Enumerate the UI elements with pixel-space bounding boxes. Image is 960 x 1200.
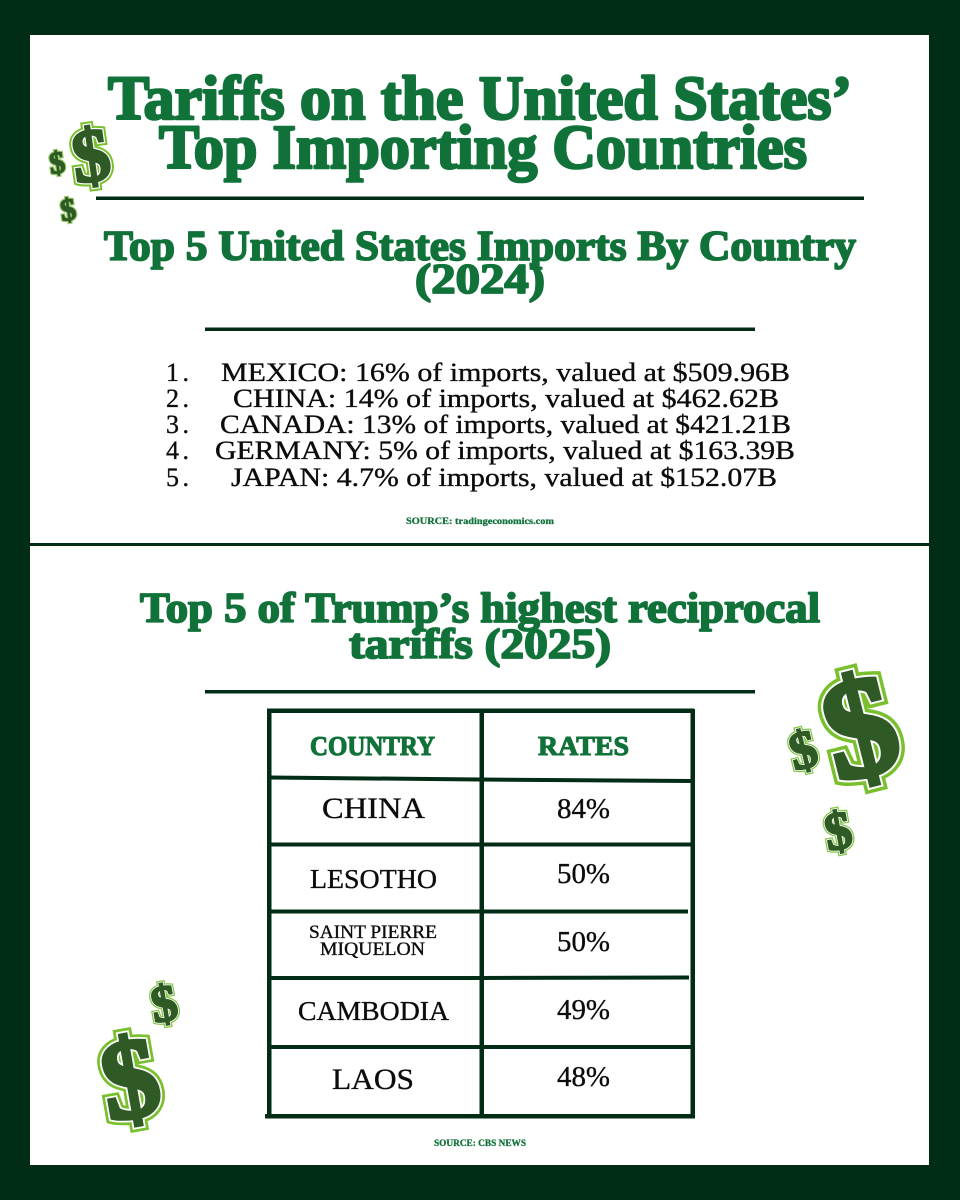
imports list: 4. (166, 436, 189, 465)
heading: reciprocal tariffs: tariffs (2025) (349, 622, 611, 668)
imports list: GERMANY: 5% of imports, valued at $163.39B (215, 436, 795, 465)
icon: dollar large bottom left: $ (91, 1011, 169, 1146)
icon: dollar small top left 1: $ (47, 144, 67, 181)
imports list: 1. (166, 358, 189, 387)
heading: reciprocal tariffs: Top 5 of Trump’s highest reciprocal (140, 586, 820, 632)
imports list: 2. (166, 384, 189, 413)
rates column: 84% (557, 794, 610, 825)
icon: dollar small right 2: $ (820, 799, 857, 863)
icon: dollar large top left: $ (66, 112, 116, 200)
icon: dollar large right: $ (807, 642, 914, 812)
rates column (557, 794, 610, 1093)
icon: dollar small right 2: $ (820, 799, 857, 863)
country column: CHINA (322, 792, 425, 825)
icon: dollar large bottom left: $ (91, 1011, 169, 1146)
icon: dollar large right: $ (807, 642, 914, 812)
icon: dollar small right 2: $ (820, 799, 857, 863)
icon: dollar small right 1: $ (783, 718, 824, 782)
icon: dollar small top left 2: $ (58, 191, 78, 228)
table header: RATES (538, 731, 629, 761)
icon: dollar large top left: $ (66, 112, 116, 200)
source: cbs news: SOURCE: CBS NEWS (434, 1139, 526, 1149)
imports list: 3. (166, 410, 189, 439)
heading: top 5 imports: (2024) (415, 257, 545, 303)
icon: dollar small bottom left: $ (147, 974, 182, 1035)
title (108, 65, 852, 182)
country column: CAMBODIA (298, 996, 450, 1026)
icon: dollar small top left 1: $ (47, 144, 67, 181)
imports list: CHINA: 14% of imports, valued at $462.62B (233, 384, 779, 413)
imports list: JAPAN: 4.7% of imports, valued at $152.07B (231, 463, 777, 492)
rates column: 50% (557, 927, 610, 958)
icon: dollar large right: $ (807, 642, 914, 812)
heading: reciprocal tariffs (140, 586, 820, 668)
icon: dollar large bottom left: $ (91, 1011, 169, 1146)
icon: dollar small bottom left: $ (147, 974, 182, 1035)
imports list (166, 358, 795, 492)
country column (298, 792, 450, 1096)
icon: dollar small right 1: $ (783, 718, 824, 782)
rates column: 48% (557, 1062, 610, 1093)
imports list: 5. (166, 463, 189, 492)
heading: top 5 imports: Top 5 United States Imports By Country (104, 224, 856, 270)
icon: dollar small right 1: $ (783, 718, 824, 782)
imports list: CANADA: 13% of imports, valued at $421.21B (220, 410, 791, 439)
country column: SAINT PIERRE (309, 923, 437, 943)
table header (310, 731, 629, 761)
country column: LESOTHO (310, 864, 437, 894)
rates column: 50% (557, 859, 610, 890)
panel: tariffs (30, 546, 929, 1165)
rates column: 49% (557, 995, 610, 1026)
icon: dollar large top left: $ (66, 112, 116, 200)
source: trading economics: SOURCE: tradingeconomics.com (406, 517, 554, 527)
imports list: MEXICO: 16% of imports, valued at $509.96B (221, 358, 790, 387)
icon: dollar small bottom left: $ (147, 974, 182, 1035)
heading: top 5 imports (104, 224, 856, 303)
title: Top Importing Countries (159, 114, 807, 182)
title: Tariffs on the United States’ (108, 65, 852, 133)
tariff table (265, 708, 695, 1118)
country column: LAOS (332, 1063, 414, 1096)
country column: MIQUELON (320, 940, 425, 960)
panel: imports (30, 35, 929, 543)
icon: dollar small top left 2: $ (58, 191, 78, 228)
table header: COUNTRY (310, 731, 435, 761)
